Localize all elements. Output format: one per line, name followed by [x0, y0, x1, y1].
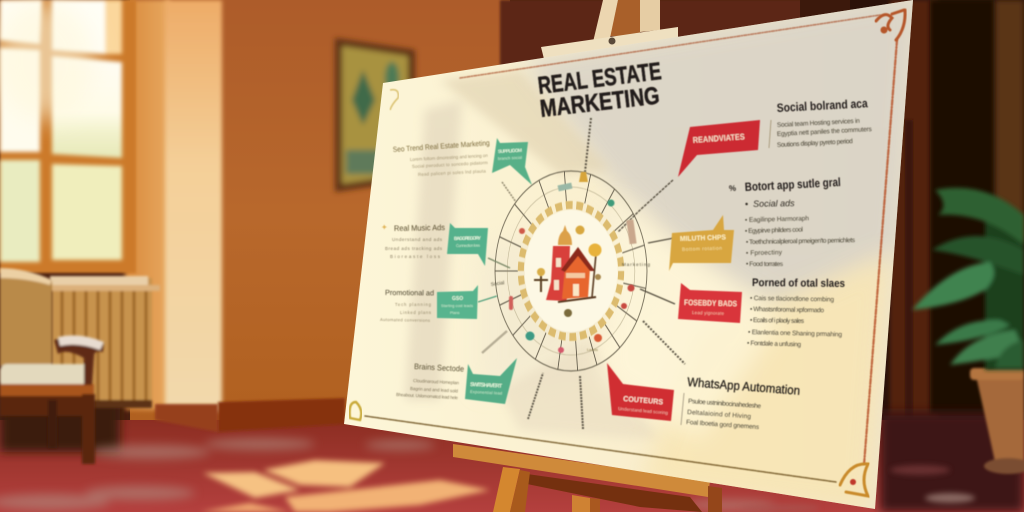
text block: Real Music Ads: ✦ [381, 223, 388, 232]
text block: Real Music Ads: Bread ads tracking ads [385, 246, 443, 251]
text block: left Seo trend: Social pwroduct to soncedo pidatorm [412, 160, 488, 169]
text block: WhatsApp Automation: Foal Iboetia gord gnemens [686, 419, 760, 431]
text block: Promotional ad: Linked plans [400, 310, 431, 315]
callout: red bottom: COUTEURS [623, 394, 663, 406]
callout: red middle: Lead yignorate [692, 310, 725, 316]
framed picture on wall [335, 38, 415, 192]
text block: Bottom app suite: • Fproectiny [746, 249, 783, 257]
callout: green 4: SWITSHAVERT [470, 382, 503, 390]
icon: corner ornament bottom left [350, 402, 361, 420]
title [536, 58, 663, 123]
text block: Promotional ad: Automated conversions [380, 317, 430, 323]
text block: Social media: Soutions display pyreto period [777, 138, 853, 149]
callout: red middle: FOSEBDY BADS [684, 298, 738, 308]
wheel labels: Social [490, 280, 505, 288]
text block: Bottom app suite [729, 175, 856, 268]
text block: Brains Sectode: Cloudinaroud Homeplan [413, 378, 460, 385]
text block: Social media: Egyptia nett paniles the commuters [777, 126, 873, 138]
callout: green 1: SUPPLIGOM [498, 148, 522, 155]
text block: WhatsApp Automation [681, 375, 801, 431]
icon: corner ornament bottom right [840, 464, 868, 496]
text block: Brains Sectode [396, 362, 465, 400]
callout: gold: Bottom rotation [682, 246, 722, 253]
callout: green 3: Starting cost leads [441, 304, 473, 308]
text block: Real Music Ads: Real Music Ads [394, 223, 445, 233]
window with sunlit panes [0, 0, 136, 273]
text block: Pointed of total sales: Porned of otal slaes [752, 277, 845, 290]
callout: green 2: BAGGREGORY [454, 236, 482, 242]
callout: green 2: Connection loss [456, 243, 480, 248]
callout: red top: REANDVIATES [692, 131, 745, 145]
text block: Bottom app suite: • Egypirve philders cool [745, 226, 804, 235]
potted plant [912, 188, 1024, 474]
wheel labels: Leads [587, 347, 598, 352]
text block: Social media: Social bolrand aca [776, 96, 868, 115]
wheel diagram [478, 118, 685, 429]
radiator [50, 276, 160, 408]
text block: Social media: Social team Hosting services in [777, 118, 860, 129]
house icon at center [534, 225, 602, 317]
text block: Promotional ad [380, 288, 434, 323]
text block: Pointed of total sales: • Fontdale a unfusing [747, 340, 801, 348]
text block: Bottom app suite: • Eagilinpe Harmoraph [745, 215, 809, 224]
text block: Bottom app suite: • Social ads [745, 198, 795, 209]
wheel labels [490, 262, 650, 352]
wheel labels: Marketing [622, 262, 650, 267]
text block: Bottom app suite: • Food torrates [746, 261, 784, 268]
callout: green 1: branch social [498, 155, 522, 161]
callout: green 4: Exponential lead [470, 389, 502, 396]
floor: red patterned carpet with sun patches [0, 398, 1024, 512]
callout: gold: MILUTH CHPS [680, 234, 726, 243]
text block: Brains Sectode: Bagrin and and lead sold [410, 386, 459, 394]
text block: Real Music Ads [381, 223, 445, 259]
text block: WhatsApp Automation: Deltalaioind of Hiving [687, 409, 752, 420]
text block: Pointed of total sales [747, 277, 845, 348]
text block: left Seo trend: Lorem foltom dmoresting and lencing on [410, 153, 488, 162]
text block: Promotional ad: Tech planning [395, 302, 432, 307]
callout: green 1 [492, 138, 532, 185]
text block: Bottom app suite: Botort app sutle gral [744, 175, 841, 194]
callout: red middle [678, 283, 742, 323]
sunlight and shadow on board [405, 0, 920, 512]
title: MARKETING [539, 83, 661, 123]
text block: Real Music Ads: Understand and ads [392, 237, 443, 242]
callout: green 3: GSO [452, 296, 463, 302]
text block: WhatsApp Automation: WhatsApp Automation [687, 375, 801, 398]
decorative border [365, 15, 897, 482]
callout: green 3: Plans [450, 311, 460, 315]
text block: Brains Sectode: Bheabout. Uslomomatcd lead hele [396, 392, 459, 400]
icon: corner ornament top left [390, 90, 398, 110]
title: REAL ESTATE [536, 58, 663, 100]
callout: green 2 [447, 223, 488, 266]
callout: gold [669, 215, 734, 271]
text block: left Seo trend [393, 138, 490, 177]
text block: Pointed of total sales: • Cais se tlaciondlone combing [750, 295, 834, 303]
panel: infographic board [344, 0, 920, 512]
armchair [0, 268, 104, 464]
icon: corner ornament top right [876, 10, 905, 40]
text block: Bottom app suite: % [729, 184, 736, 193]
outer wheel with spokes [495, 171, 647, 371]
text block: left Seo trend: Read palicen pi soles lnd plauta [418, 168, 486, 177]
easel [453, 0, 722, 512]
text block: Bottom app suite: • Toethchnicalpleroal pmeigen'to pemichlets [746, 237, 856, 246]
text block: left Seo trend: Seo Trend Real Estate Marketing [393, 138, 490, 154]
callout: red top [678, 120, 760, 177]
radiating callout lines [478, 118, 685, 429]
text block: Promotional ad: Promotional ad [385, 288, 434, 297]
text block: Brains Sectode: Brains Sectode [414, 362, 465, 374]
text block: Pointed of total sales: • Ecails of i plaoly sales [750, 317, 805, 325]
text block: Real Music Ads: Bioreaste loss [390, 254, 441, 259]
callout: red bottom: Understand lead scoring [618, 406, 669, 415]
callout: green 4 [465, 358, 517, 404]
wheel node icons [509, 172, 637, 353]
callout: red bottom [607, 363, 674, 421]
text block: Pointed of total sales: • Elanlentia one Shaning prmahing [748, 329, 842, 338]
callout: green 3 [437, 285, 478, 319]
text block: Pointed of total sales: • Whastsnforomal xpformado [750, 306, 824, 314]
text block: Social media [769, 96, 873, 149]
text block: WhatsApp Automation: Psuloe ustninibocinahedeshe [688, 398, 762, 410]
